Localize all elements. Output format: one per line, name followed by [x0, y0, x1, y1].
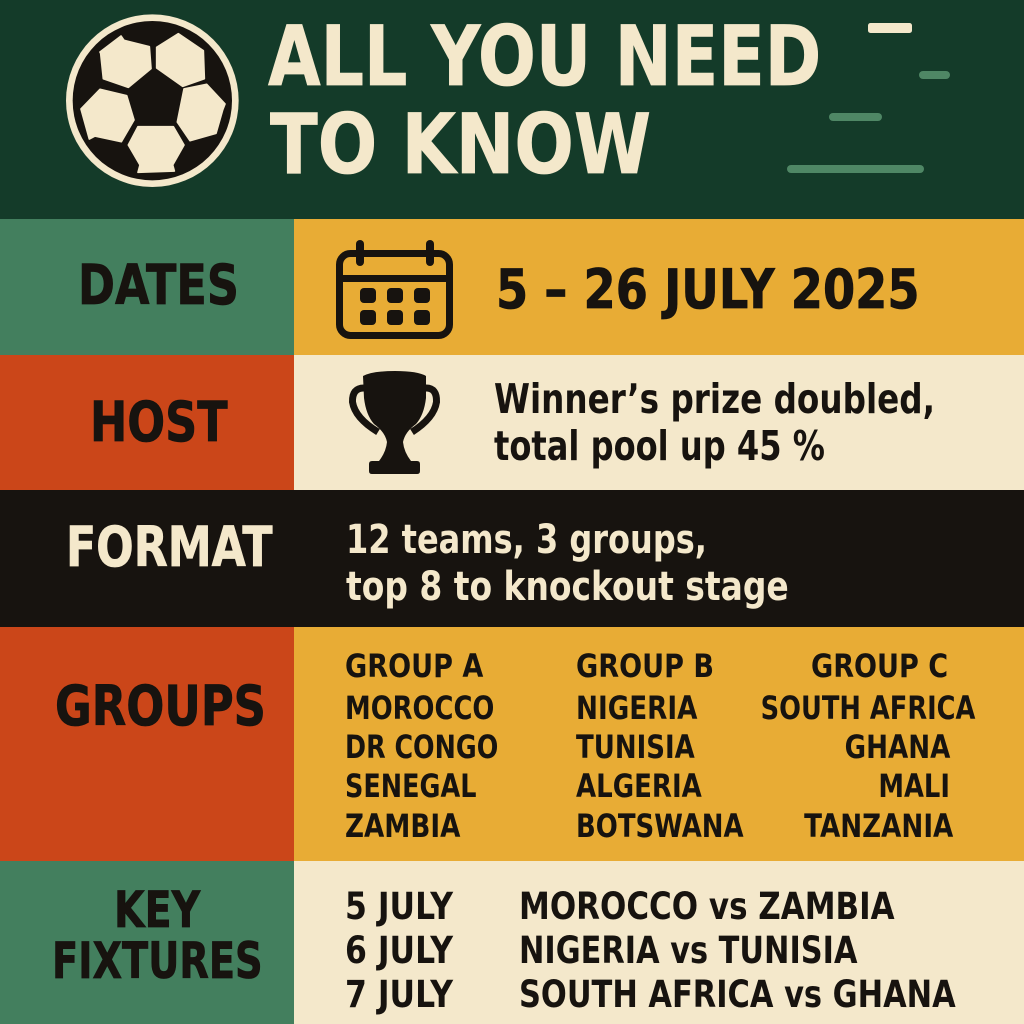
title [268, 8, 821, 193]
heading: groups: GROUPS [55, 674, 266, 738]
header panel [0, 0, 1024, 219]
group B [576, 647, 744, 845]
speed lines [787, 23, 950, 173]
heading: key fixtures: KEY [114, 881, 200, 939]
panel: dates [0, 219, 1024, 355]
title: ALL YOU NEED [268, 8, 821, 105]
group A [345, 647, 498, 845]
host label cell [0, 355, 294, 490]
heading: key fixtures [52, 881, 263, 990]
heading: dates: DATES [78, 253, 239, 317]
group B: NIGERIA [576, 689, 697, 727]
heading: format: FORMAT [66, 515, 273, 579]
icon: calendar [336, 240, 453, 339]
date text: 5 – 26 JULY 2025 [496, 258, 920, 321]
fixtures list: SOUTH AFRICA vs GHANA [519, 973, 956, 1016]
icon: trophy [349, 371, 440, 474]
group C: GROUP C [811, 647, 948, 685]
group C: MALI [878, 767, 950, 805]
format text: 12 teams, 3 groups, [346, 517, 707, 563]
group B: BOTSWANA [576, 807, 744, 845]
format text [346, 517, 789, 610]
dates label cell [0, 219, 294, 355]
panel: format [0, 490, 1024, 627]
heading: key fixtures: FIXTURES [52, 932, 263, 990]
heading: host: HOST [90, 390, 228, 454]
group A: GROUP A [345, 647, 483, 685]
prize text: total pool up 45 % [494, 422, 825, 470]
group C: GHANA [844, 728, 950, 766]
group B: TUNISIA [576, 728, 695, 766]
group A: ZAMBIA [345, 807, 460, 845]
format text: top 8 to knockout stage [346, 564, 789, 610]
group C: SOUTH AFRICA [760, 689, 975, 727]
panel: host [0, 355, 1024, 490]
group A: DR CONGO [345, 728, 498, 766]
key fixtures label cell [0, 861, 294, 1024]
group B: GROUP B [576, 647, 714, 685]
title: TO KNOW [270, 96, 651, 193]
group C: TANZANIA [804, 807, 953, 845]
fixtures list: MOROCCO vs ZAMBIA [519, 885, 895, 928]
fixtures list: 7 JULY [345, 973, 453, 1016]
fixtures list [345, 885, 956, 1016]
prize text: Winner’s prize doubled, [494, 375, 935, 423]
group C [760, 647, 976, 845]
group A: SENEGAL [345, 767, 476, 805]
group A: MOROCCO [345, 689, 494, 727]
panel: groups [0, 627, 1024, 861]
icon: soccer ball [66, 14, 239, 187]
fixtures list: 5 JULY [345, 885, 453, 928]
panel: key fixtures [0, 861, 1024, 1024]
group B: ALGERIA [576, 767, 702, 805]
fixtures list: 6 JULY [345, 929, 453, 972]
fixtures list: NIGERIA vs TUNISIA [519, 929, 857, 972]
prize text [494, 375, 935, 470]
groups label cell [0, 627, 294, 861]
